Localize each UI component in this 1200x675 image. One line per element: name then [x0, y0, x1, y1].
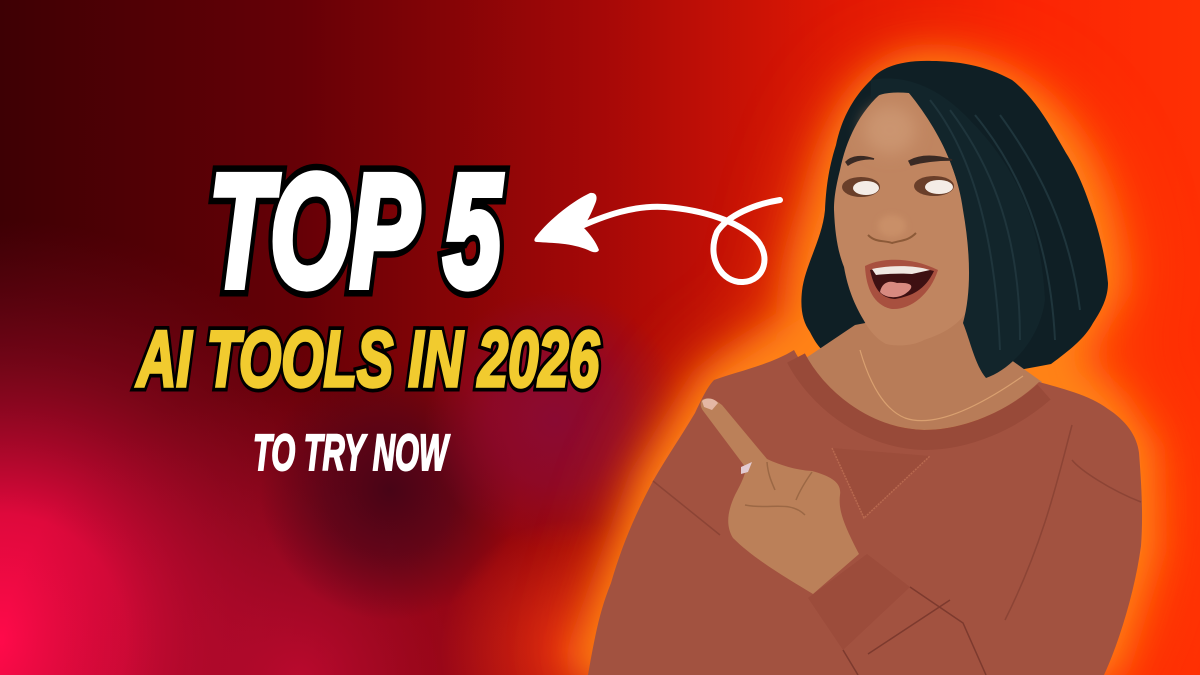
hand [701, 398, 859, 594]
necklace [860, 350, 1023, 421]
forehead highlight [864, 106, 916, 154]
title: TOP 5: TOP 5 [209, 141, 502, 320]
hand creases [745, 462, 812, 515]
collar [796, 358, 1044, 440]
right eye [914, 176, 954, 196]
chest V stitch [832, 448, 930, 518]
neck and chest [800, 300, 1042, 430]
mouth [865, 260, 938, 309]
hair front strands [871, 78, 1045, 378]
left eyebrow [846, 157, 874, 165]
hair strands highlights [930, 100, 1080, 350]
cuff [808, 554, 910, 650]
nose [868, 215, 916, 243]
subtitle: AI TOOLS IN 2026: AI TOOLS IN 2026 [136, 314, 600, 403]
sleeve seams [653, 425, 1141, 620]
hair back [801, 61, 1108, 378]
orange glow behind person [596, 75, 1135, 660]
fingernail and ring [702, 399, 752, 474]
title: TOP 5: TOP 5 [209, 141, 502, 320]
face [834, 88, 970, 345]
tagline: TO TRY NOW: TO TRY NOW [253, 424, 450, 481]
person [588, 61, 1142, 675]
arrow pointing at title [534, 193, 780, 282]
subtitle: AI TOOLS IN 2026 [136, 314, 600, 403]
left eye [842, 177, 880, 197]
sweater body [588, 350, 1142, 675]
forearm fold lines [843, 587, 986, 675]
right eyebrow [909, 156, 952, 165]
subtitle: AI TOOLS IN 2026: AI TOOLS IN 2026 [136, 314, 600, 403]
title: TOP 5 [209, 141, 502, 320]
